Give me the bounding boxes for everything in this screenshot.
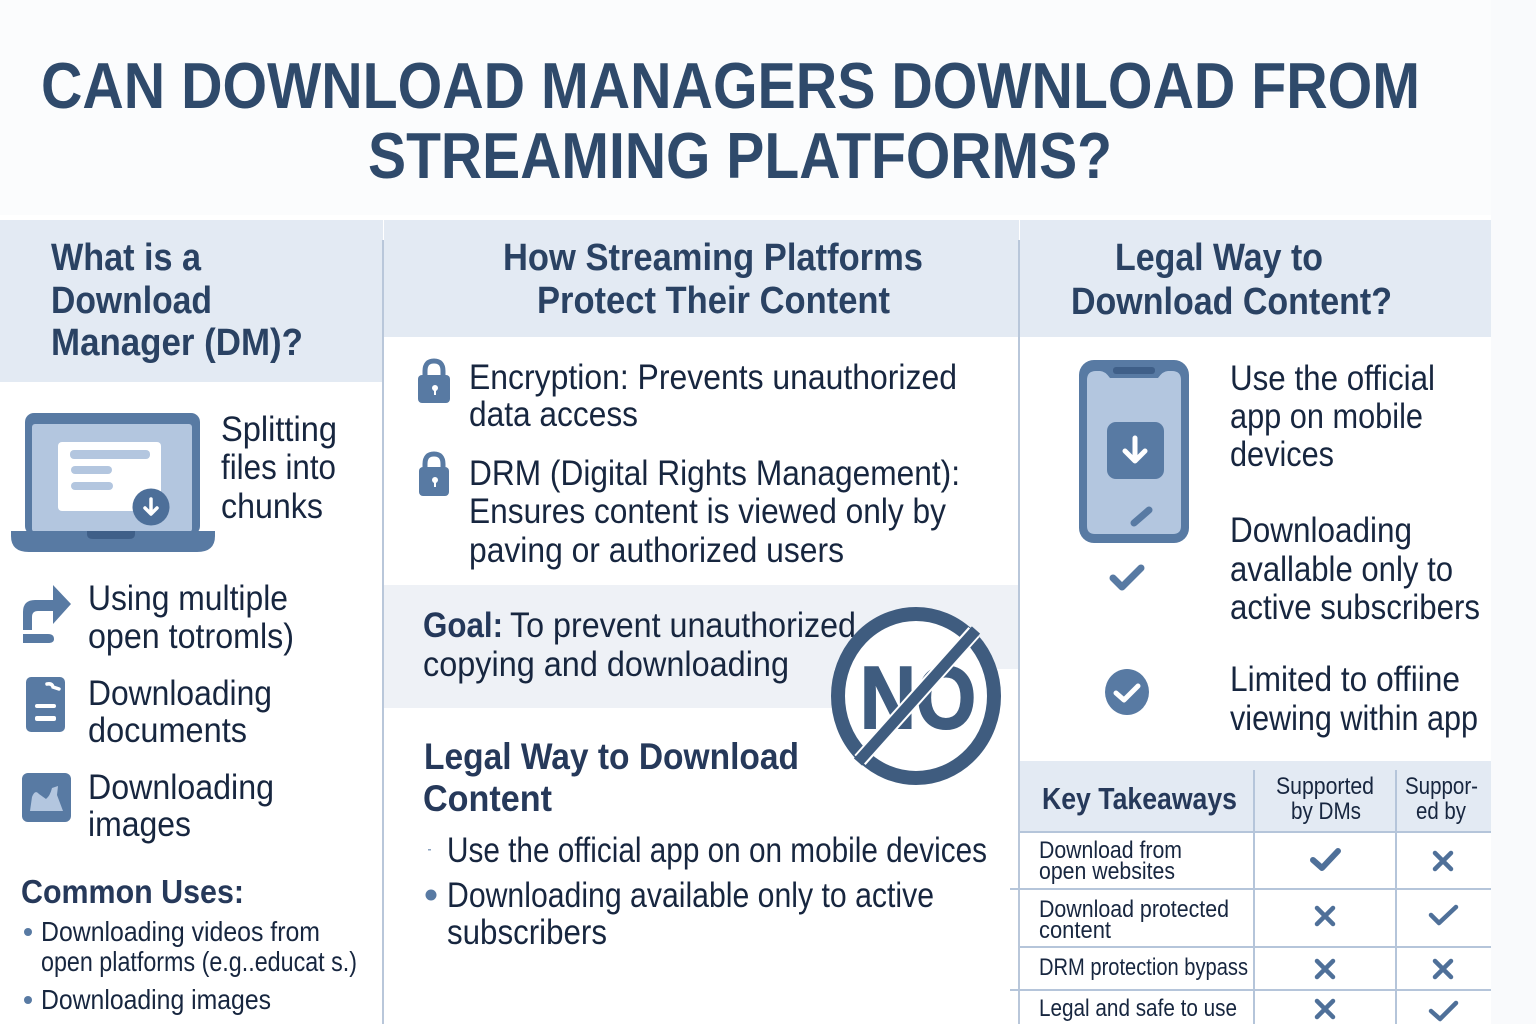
text: splitting files <box>221 410 337 526</box>
icon: image <box>22 773 71 822</box>
list: legal way: subscribers <box>447 913 607 952</box>
text: DRM: paving or authorized users <box>469 531 844 570</box>
callout: goal: Goal: <box>423 606 503 645</box>
row: download protected content: content <box>1039 917 1111 944</box>
icon: lock <box>419 454 449 496</box>
heading: what is a DM: What is a <box>51 237 202 279</box>
callout: goal <box>384 585 1019 708</box>
heading: legal way: Legal Way to <box>1115 237 1323 279</box>
panel: how streaming platforms protect content <box>384 220 1019 952</box>
icon: lock <box>418 361 450 403</box>
row: legal and safe to use <box>1039 995 1456 1022</box>
icon: no symbol: NO <box>860 648 976 747</box>
text: encryption: Encryption: Prevents unauthorized <box>469 358 957 397</box>
text: downloading documents: documents <box>88 711 247 750</box>
icon: document <box>26 677 65 732</box>
heading: what is a DM <box>51 237 303 364</box>
callout: goal: To prevent unauthorized <box>510 606 856 645</box>
table: key takeaways <box>1010 761 1491 1024</box>
text: DRM: DRM (Digital Rights Management): <box>469 454 960 493</box>
text: DRM <box>469 454 960 570</box>
heading: legal way: Download Content? <box>1071 281 1392 323</box>
heading: legal way to download content: Legal Way to Download <box>424 736 799 777</box>
heading: streaming protection: Protect Their Content <box>537 280 890 322</box>
list: legal way: Downloading available only to active <box>447 876 934 915</box>
text: subscribers: active subscribers <box>1230 588 1480 627</box>
icon: redirect arrow <box>23 585 71 643</box>
text: offline viewing: Limited to offiine <box>1230 660 1460 699</box>
list: common uses: Downloading videos from <box>41 916 320 947</box>
table header: ed by <box>1416 798 1466 825</box>
text: encryption: data access <box>469 395 638 434</box>
text: official app: devices <box>1230 435 1334 474</box>
row: download protected content <box>1039 896 1456 944</box>
table header: by DMs <box>1291 798 1361 825</box>
text: splitting files: files into <box>221 448 336 487</box>
heading: legal way to download content: Content <box>423 778 552 819</box>
text: splitting files: chunks <box>221 487 323 526</box>
text: using multiple: open totromls) <box>88 617 294 656</box>
icon: check mark <box>1113 568 1141 587</box>
heading: common uses: Common Uses: <box>21 873 244 910</box>
heading: what is a DM: Manager (DM)? <box>51 322 303 364</box>
text: downloading documents <box>88 674 272 750</box>
row: download from open websites <box>1039 837 1451 885</box>
text: offline viewing <box>1230 660 1478 738</box>
table header: Key Takeaways <box>1042 781 1237 816</box>
icon: no symbol <box>838 614 994 778</box>
icon: phone <box>1079 360 1189 543</box>
list: common uses: open platforms (e.g..educat s.) <box>41 946 357 977</box>
text: subscribers: Downloading <box>1230 511 1412 550</box>
icon: check circle <box>1105 669 1149 715</box>
text: downloading images: Downloading <box>88 768 274 807</box>
column dividers <box>383 240 1019 1024</box>
title <box>41 49 1420 192</box>
list: legal way <box>426 831 987 952</box>
text: downloading documents: Downloading <box>88 674 272 713</box>
text: downloading images: images <box>88 805 191 844</box>
list: legal way: Use the official app on on mobile devices <box>447 831 987 870</box>
text: official app: Use the official <box>1230 359 1435 398</box>
table header: Supported <box>1276 773 1374 800</box>
callout: goal: copying and downloading <box>423 645 789 684</box>
heading: streaming protection: How Streaming Platforms <box>503 237 923 279</box>
row: download protected content: Download protected <box>1039 896 1229 923</box>
row: download from open websites: Download from <box>1039 837 1182 864</box>
text: official app <box>1230 359 1435 474</box>
row: legal and safe to use: Legal and safe to use <box>1039 995 1237 1022</box>
heading: legal way to download content <box>423 736 799 819</box>
heading: streaming protection <box>503 237 923 322</box>
row: DRM protection bypass <box>1039 954 1451 981</box>
row: DRM protection bypass: DRM protection bypass <box>1039 954 1248 981</box>
text: using multiple: Using multiple <box>88 579 288 618</box>
icon: laptop with download <box>11 413 215 552</box>
heading: legal way <box>1071 237 1392 323</box>
text: official app: app on mobile <box>1230 397 1423 436</box>
list: common uses <box>24 916 357 1015</box>
text: downloading images <box>88 768 274 844</box>
text: subscribers: avallable only to <box>1230 550 1453 589</box>
text: encryption <box>469 358 957 434</box>
text: DRM: Ensures content is viewed only by <box>469 492 946 531</box>
row: download from open websites: open websites <box>1039 858 1175 885</box>
title: STREAMING PLATFORMS? <box>368 119 1112 192</box>
text: offline viewing: viewing within app <box>1230 699 1478 738</box>
text: splitting files: Splitting <box>221 410 337 449</box>
heading: what is a DM: Download <box>51 280 212 322</box>
table header <box>1042 773 1478 825</box>
text: using multiple <box>88 579 294 656</box>
list: common uses: Downloading images <box>41 984 271 1015</box>
text: subscribers <box>1230 511 1480 627</box>
panel: what is a download manager <box>0 220 383 1015</box>
table header: Suppor- <box>1405 773 1478 800</box>
panel: legal way to download content <box>1020 220 1491 738</box>
